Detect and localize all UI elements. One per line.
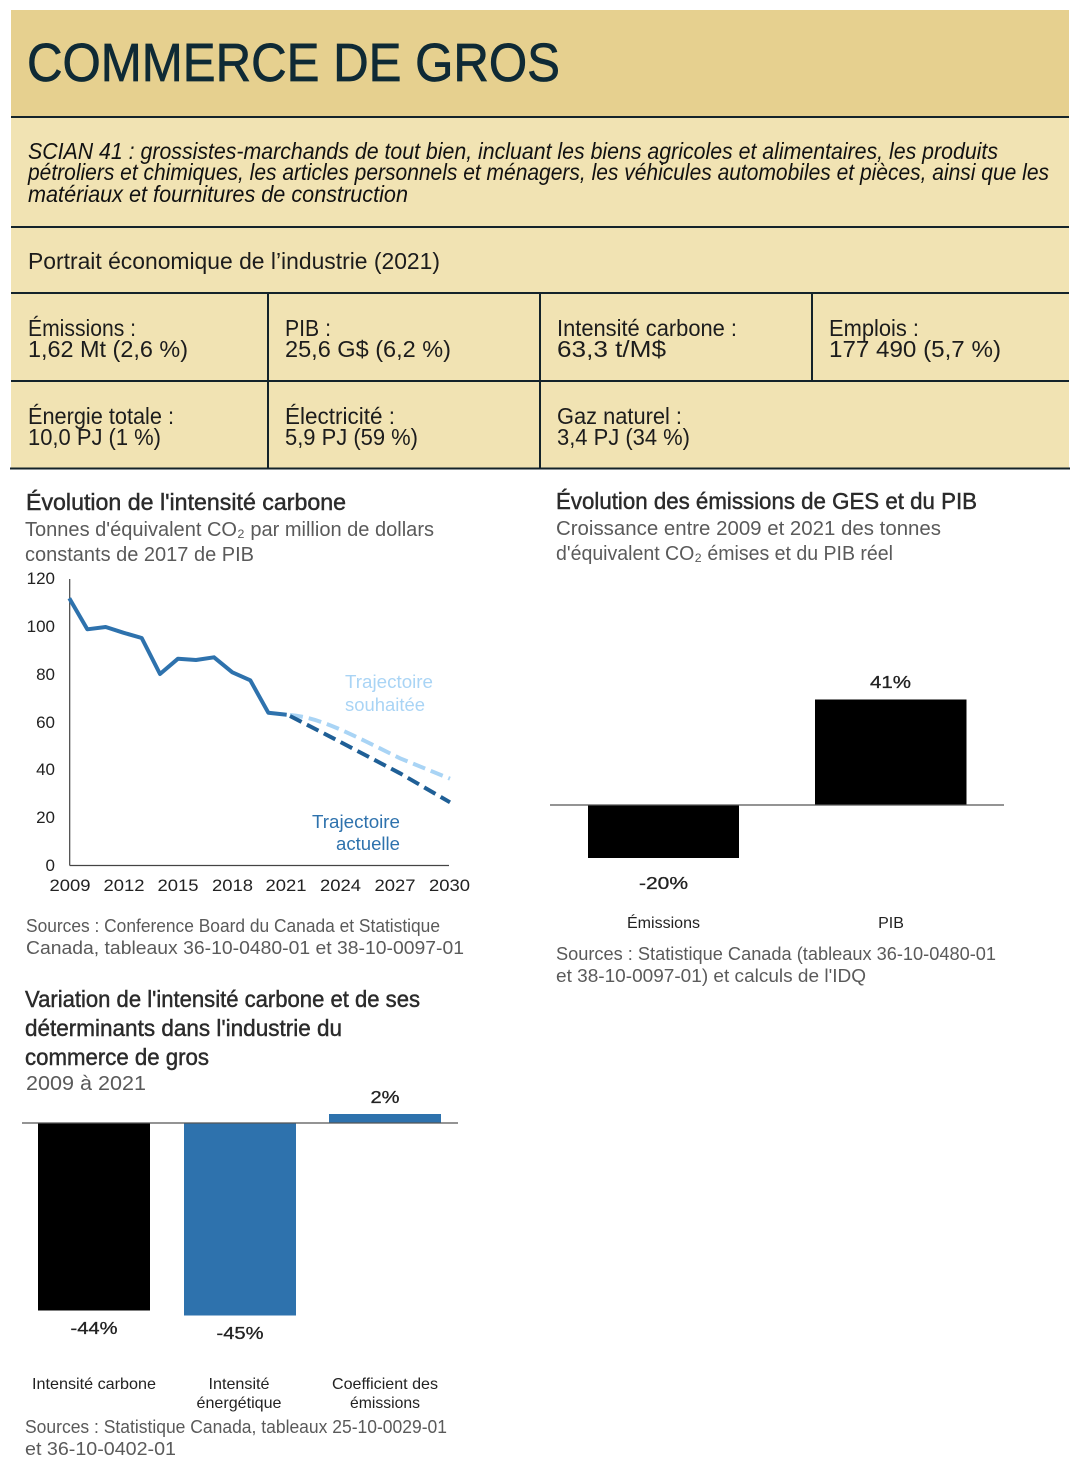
heading: évolution des émissions: d'équivalent CO₂ émises et du PIB réel bbox=[556, 543, 893, 565]
bar chart: déterminants: -45% bbox=[216, 1323, 264, 1343]
cell: PIB bbox=[285, 315, 451, 362]
line chart: intensité carbone: 120 bbox=[27, 569, 55, 588]
bar chart: émissions et PIB: -20% bbox=[639, 873, 688, 893]
cell: intensité carbone: 63,3 t/M$ bbox=[557, 336, 666, 362]
source: intensité carbone: Canada, tableaux 36-10-0480-01 et 38-10-0097-01 bbox=[26, 938, 464, 958]
panel: portrait heading bbox=[11, 226, 1069, 293]
bar chart: émissions et PIB: Émissions bbox=[627, 913, 700, 932]
line chart: intensité carbone: 100 bbox=[27, 617, 55, 636]
heading: évolution de l'intensité carbone: constants de 2017 de PIB bbox=[25, 544, 254, 566]
bar chart: émissions et PIB bbox=[550, 672, 1004, 932]
label: trajectoire actuelle: Trajectoire bbox=[312, 812, 400, 832]
heading: évolution de l'intensité carbone bbox=[25, 489, 434, 566]
source: émissions et PIB: et 38-10-0097-01) et calculs de l'IDQ bbox=[556, 966, 866, 986]
source: émissions et PIB: Sources : Statistique Canada (tableaux 36-10-0480-01 bbox=[556, 944, 996, 964]
cell: électricité: Électricité : bbox=[285, 403, 395, 429]
heading: évolution des émissions: Croissance entre 2009 et 2021 des tonnes bbox=[556, 518, 941, 540]
bar chart: déterminants: énergétique bbox=[196, 1395, 282, 1412]
label: trajectoire souhaitée: Trajectoire bbox=[345, 672, 433, 692]
heading: évolution de l'intensité carbone: Évolution de l'intensité carbone bbox=[26, 489, 346, 515]
cell: gaz naturel: Gaz naturel : bbox=[557, 403, 682, 429]
cell: énergie totale: Énergie totale : bbox=[28, 403, 174, 429]
heading: variation de l'intensité carbone: déterminants dans l'industrie du bbox=[25, 1015, 342, 1041]
line chart: intensité carbone: 0 bbox=[46, 856, 55, 875]
line chart: intensité carbone: 2015 bbox=[158, 876, 198, 895]
line chart: intensité carbone: 80 bbox=[36, 665, 55, 684]
cell: intensité carbone bbox=[557, 315, 737, 362]
heading: évolution des émissions: Évolution des émissions de GES et du PIB bbox=[556, 488, 977, 514]
heading: évolution des émissions bbox=[556, 488, 977, 565]
source: intensité carbone bbox=[26, 916, 464, 958]
bar chart: déterminants: Intensité carbone bbox=[32, 1376, 156, 1393]
panel: definition: matériaux et fournitures de construction bbox=[28, 181, 408, 207]
cell: émissions: 1,62 Mt (2,6 %) bbox=[28, 336, 188, 362]
cell: énergie totale: 10,0 PJ (1 %) bbox=[28, 424, 161, 450]
line chart: intensité carbone: 2012 bbox=[104, 876, 144, 895]
panel: definition bbox=[11, 116, 1069, 227]
title banner bbox=[11, 10, 1069, 116]
cell: électricité bbox=[285, 403, 418, 450]
bar chart: déterminants bbox=[22, 1087, 458, 1412]
bar: intensité énergétique bbox=[184, 1123, 296, 1316]
source: déterminants: et 36-10-0402-01 bbox=[25, 1439, 176, 1459]
line chart: intensité carbone: 60 bbox=[36, 713, 55, 732]
series: historique bbox=[69, 598, 287, 715]
line chart: intensité carbone: 2009 bbox=[50, 876, 90, 895]
label: trajectoire actuelle bbox=[312, 812, 400, 854]
bar: émissions bbox=[588, 805, 739, 858]
cell: émissions: Émissions : bbox=[28, 315, 136, 341]
cell: gaz naturel bbox=[557, 403, 690, 450]
series: trajectoire actuelle bbox=[290, 716, 450, 802]
bar chart: déterminants: 2% bbox=[370, 1087, 400, 1107]
bar chart: déterminants: Intensité bbox=[208, 1376, 270, 1393]
label: trajectoire souhaitée bbox=[345, 672, 433, 715]
line chart: intensité carbone: 20 bbox=[36, 808, 55, 827]
cell: énergie totale bbox=[28, 403, 174, 450]
line chart: intensité carbone: 2024 bbox=[320, 876, 361, 895]
label: trajectoire souhaitée: souhaitée bbox=[345, 695, 425, 715]
heading: variation de l'intensité carbone: 2009 à 2021 bbox=[26, 1073, 146, 1095]
bar chart: déterminants: -44% bbox=[70, 1318, 118, 1338]
panel: definition: SCIAN 41 : grossistes-marchands de tout bien, incluant les biens agricoles et alimentaires, les produits bbox=[28, 138, 998, 164]
line chart: intensité carbone: 2018 bbox=[212, 876, 253, 895]
bar chart: émissions et PIB: 41% bbox=[870, 672, 911, 692]
cell: gaz naturel: 3,4 PJ (34 %) bbox=[557, 424, 690, 450]
line chart: intensité carbone: 40 bbox=[36, 760, 55, 779]
line chart: intensité carbone: 2030 bbox=[429, 876, 470, 895]
bar chart: déterminants: émissions bbox=[350, 1395, 420, 1412]
bar: coefficient des émissions bbox=[329, 1114, 441, 1123]
cell: PIB: PIB : bbox=[285, 315, 331, 341]
bar: intensité carbone bbox=[38, 1123, 150, 1310]
heading: variation de l'intensité carbone bbox=[25, 986, 420, 1095]
bar chart: émissions et PIB: PIB bbox=[878, 915, 904, 932]
source: intensité carbone: Sources : Conference Board du Canada et Statistique bbox=[26, 916, 440, 936]
line chart: intensité carbone: 2027 bbox=[374, 876, 416, 895]
title: COMMERCE DE GROS bbox=[27, 33, 560, 93]
panel: indicator table bbox=[10, 292, 1070, 470]
heading: variation de l'intensité carbone: commerce de gros bbox=[25, 1044, 209, 1070]
panel: portrait heading: Portrait économique de l’industrie (2021) bbox=[28, 248, 440, 274]
cell: émissions bbox=[28, 315, 188, 362]
line chart: intensité carbone bbox=[27, 569, 470, 895]
series: trajectoire souhaitée bbox=[290, 715, 450, 779]
cell: emplois: Emplois : bbox=[829, 315, 919, 341]
cell: PIB: 25,6 G$ (6,2 %) bbox=[285, 336, 451, 362]
source: déterminants: Sources : Statistique Canada, tableaux 25-10-0029-01 bbox=[25, 1417, 447, 1437]
cell: emplois bbox=[829, 315, 1001, 362]
heading: variation de l'intensité carbone: Variation de l'intensité carbone et de ses bbox=[25, 986, 420, 1012]
source: déterminants bbox=[25, 1417, 447, 1459]
cell: emplois: 177 490 (5,7 %) bbox=[829, 336, 1001, 362]
bar chart: déterminants: Coefficient des bbox=[332, 1376, 438, 1393]
cell: électricité: 5,9 PJ (59 %) bbox=[285, 424, 418, 450]
label: trajectoire actuelle: actuelle bbox=[336, 834, 400, 854]
bar: PIB bbox=[815, 700, 966, 805]
heading: évolution de l'intensité carbone: Tonnes d'équivalent CO₂ par million de dollars bbox=[25, 519, 434, 541]
line chart: intensité carbone: 2021 bbox=[266, 876, 306, 895]
source: émissions et PIB bbox=[556, 944, 996, 986]
cell: intensité carbone: Intensité carbone : bbox=[557, 315, 737, 341]
